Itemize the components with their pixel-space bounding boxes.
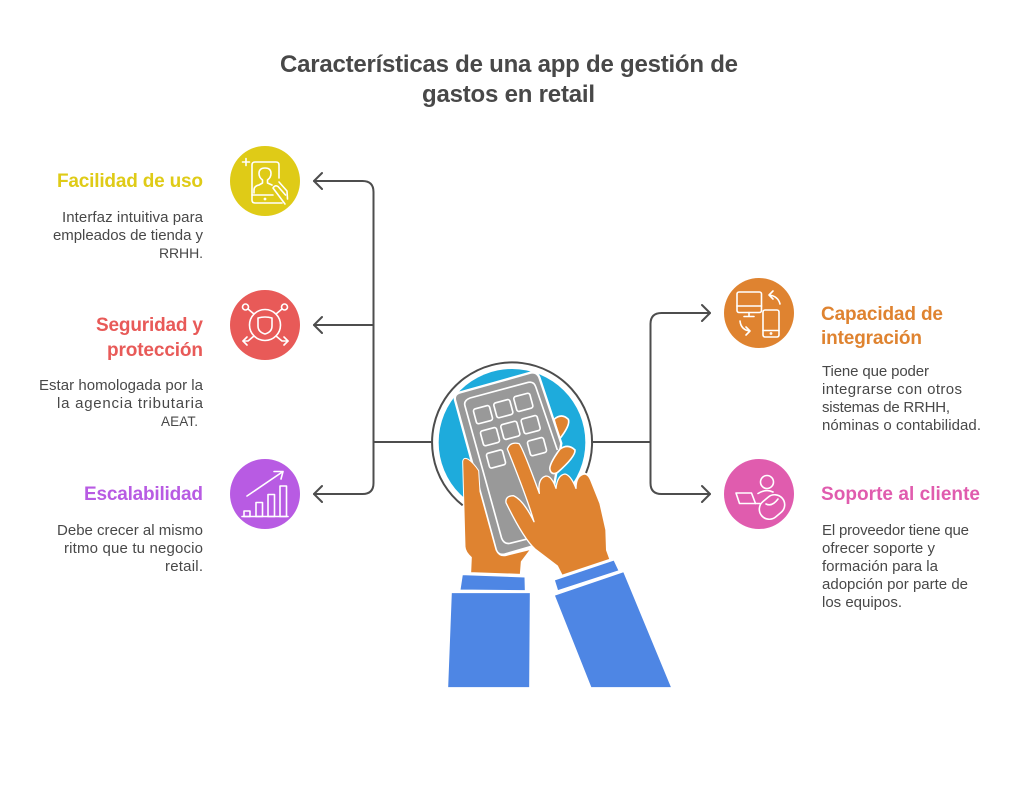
description: Debe crecer al mismo [57, 522, 203, 539]
description: sistemas de RRHH, [822, 399, 950, 416]
description: ofrecer soporte y [822, 540, 936, 557]
description: El proveedor tiene que [822, 522, 969, 539]
item: Facilidad de uso [53, 171, 204, 261]
blue disc and ring [432, 362, 592, 516]
heading [96, 315, 203, 361]
icon: phone with user [230, 146, 300, 216]
description [822, 363, 981, 434]
description: formación para la [822, 558, 939, 575]
left connector arrows [314, 173, 431, 502]
heading: Seguridad y [96, 315, 203, 336]
description: nóminas o contabilidad. [822, 417, 981, 434]
description: Estar homologada por la [39, 377, 204, 394]
heading: protección [107, 340, 203, 361]
description: empleados de tienda y [53, 227, 204, 244]
description: ritmo que tu negocio [64, 540, 203, 557]
title: Características de una app de gestión de [280, 51, 738, 78]
description: la agencia tributaria [57, 395, 204, 412]
description: adopción por parte de [822, 576, 968, 593]
description: Tiene que poder [822, 363, 929, 380]
left hand [463, 458, 531, 574]
sleeves [448, 560, 672, 688]
description: AEAT. [161, 414, 198, 429]
description: integrarse con otros [822, 381, 962, 398]
item: Capacidad de integración [821, 304, 981, 434]
description: los equipos. [822, 594, 902, 611]
title [280, 51, 738, 108]
heading: Escalabilidad [84, 484, 203, 505]
icon: shield [230, 290, 300, 360]
icon: customer support [724, 459, 794, 529]
heading: integración [821, 328, 922, 349]
central illustration: hands holding a phone [432, 362, 672, 688]
icon: growth chart [230, 459, 300, 529]
heading: Soporte al cliente [821, 484, 980, 505]
item: Escalabilidad [57, 484, 203, 575]
heading: Capacidad de [821, 304, 943, 325]
heading [821, 304, 943, 349]
item: Seguridad y protección [39, 315, 204, 429]
description [822, 522, 969, 611]
description: retail. [165, 558, 203, 575]
title: gastos en retail [422, 81, 595, 108]
description [39, 377, 204, 429]
heading: Facilidad de uso [57, 171, 203, 192]
description [53, 209, 204, 261]
description: Interfaz intuitiva para [62, 209, 204, 226]
middle finger over the phone [550, 446, 575, 474]
description: RRHH. [159, 245, 203, 261]
right connector arrows [592, 305, 710, 502]
right hand [506, 443, 610, 575]
upper finger behind the phone [554, 416, 569, 439]
description [57, 522, 203, 575]
phone [455, 372, 561, 555]
item: Soporte al cliente [821, 484, 980, 611]
icon: devices sync [724, 278, 794, 348]
